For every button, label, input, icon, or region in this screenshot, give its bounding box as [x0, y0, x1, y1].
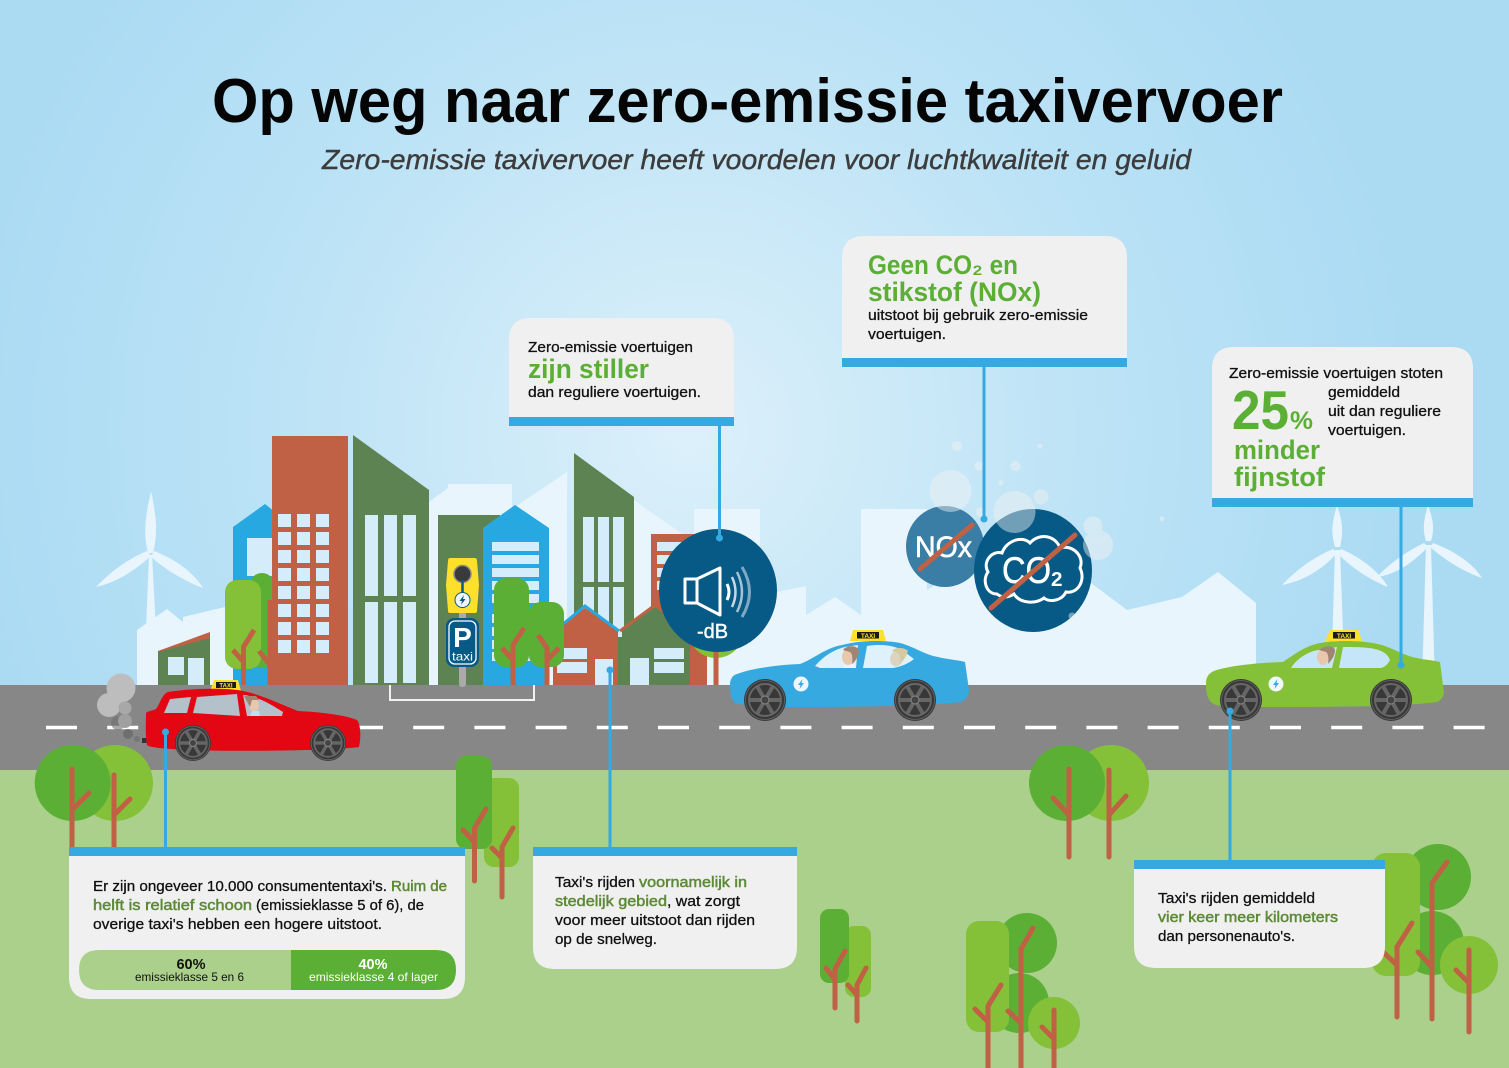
- city buildings: [158, 435, 743, 685]
- panel: vier keer meer kilometers: vier keer meer kilometers: [1158, 909, 1338, 926]
- panel: vier keer meer kilometers: dan personenauto's.: [1158, 928, 1295, 945]
- panel: consumententaxi's: helft is relatief schoon: [93, 897, 252, 914]
- tree behind speaker: [689, 606, 743, 685]
- panel: 25% minder fijnstof: minder: [1234, 435, 1320, 465]
- panel: 25% minder fijnstof: %: [1290, 407, 1313, 435]
- stacked bar 60/40: 40%: [358, 957, 388, 973]
- icon: CO2 cloud crossed out: CO: [1002, 550, 1051, 591]
- blue tower: [483, 505, 549, 685]
- panel: zijn stiller: dan reguliere voertuigen.: [528, 384, 701, 401]
- icon: speaker -dB: [659, 529, 777, 652]
- taxi sign: TAXI: [861, 633, 875, 640]
- panel: geen CO2 en stikstof: stikstof (NOx): [868, 277, 1041, 307]
- panel: 25% minder fijnstof: fijnstof: [1234, 462, 1326, 492]
- panel: consumententaxi's: overige taxi's hebben een hogere uitstoot.: [93, 916, 382, 933]
- taxi sign: [210, 680, 241, 691]
- panel: geen CO2 en stikstof: [842, 236, 1127, 367]
- green tower: [353, 435, 429, 685]
- panel: stedelijk gebied: voornamelijk in: [639, 874, 747, 891]
- stacked bar 60/40: [79, 950, 456, 990]
- subtitle: Zero-emissie taxivervoer heeft voordelen voor luchtkwaliteit en geluid: [321, 144, 1192, 175]
- blue building left: [233, 504, 275, 685]
- foreground trees: bottom right: [1372, 844, 1498, 1032]
- red building behind speaker: [651, 534, 707, 685]
- icon: CO2 cloud crossed out: [974, 509, 1092, 632]
- small house left: [158, 632, 210, 685]
- panel: zijn stiller: zijn stiller: [528, 354, 649, 384]
- charging and parking sign: [446, 558, 479, 687]
- panel: 25% minder fijnstof: [1212, 347, 1473, 507]
- icon: speaker -dB: -dB: [697, 621, 728, 643]
- background skyline: [137, 472, 1256, 685]
- foreground trees: far left: [35, 745, 153, 850]
- panel: consumententaxi's: [69, 847, 465, 999]
- exhaust smoke: [97, 674, 140, 742]
- wind turbines: right: [1282, 505, 1482, 685]
- panel: geen CO2 en stikstof: voertuigen.: [868, 326, 946, 343]
- icon: CO2 cloud crossed out: 2: [1051, 569, 1062, 591]
- panel: zijn stiller: Zero-emissie voertuigen: [528, 339, 693, 356]
- panel: stedelijk gebied: Taxi's rijden: [555, 874, 635, 891]
- charging and parking sign: taxi: [452, 650, 473, 664]
- passengers: [842, 646, 908, 668]
- panel: stedelijk gebied: [533, 847, 797, 969]
- panel: stedelijk gebied: op de snelweg.: [555, 931, 657, 948]
- emission bubbles: [930, 441, 1164, 620]
- panel: 25% minder fijnstof: 25: [1232, 379, 1289, 441]
- panel: 25% minder fijnstof: uit dan reguliere: [1328, 403, 1441, 420]
- foreground trees: bottom pair: [820, 909, 871, 1021]
- panel: stedelijk gebied: voor meer uitstoot dan rijden: [555, 912, 755, 929]
- panel: geen CO2 en stikstof: Geen CO₂ en: [868, 250, 1018, 280]
- driver: [244, 696, 260, 716]
- charging and parking sign: P: [453, 622, 472, 653]
- stacked bar 60/40: 60%: [176, 957, 206, 973]
- taxi parking bay: [390, 685, 534, 700]
- panel: consumententaxi's: Ruim de: [391, 878, 447, 895]
- driver: [1317, 646, 1335, 665]
- green house: [620, 605, 690, 685]
- stacked bar 60/40: emissieklasse 4 of lager: [309, 970, 438, 984]
- panel: consumententaxi's: (emissieklasse 5 of 6), de: [256, 897, 424, 914]
- road: [0, 685, 1509, 770]
- stacked bar 60/40: emissieklasse 5 en 6: [135, 970, 244, 984]
- taxi sign: [1325, 630, 1362, 641]
- taxi sign: TAXI: [219, 684, 233, 690]
- foreground trees: mid left: [456, 756, 519, 897]
- red house: [551, 606, 619, 685]
- wind turbine: left: [96, 491, 203, 630]
- second green tower: [574, 453, 634, 685]
- panel: zijn stiller: [509, 318, 734, 426]
- panel: consumententaxi's: Er zijn ongeveer 10.000 consumententaxi's.: [93, 878, 387, 895]
- panel: stedelijk gebied: stedelijk gebied: [555, 893, 667, 910]
- panel: stedelijk gebied: , wat zorgt: [667, 893, 741, 910]
- taxi sign: TAXI: [1337, 633, 1351, 640]
- panel: 25% minder fijnstof: gemiddeld: [1328, 384, 1400, 401]
- panel: 25% minder fijnstof: Zero-emissie voertuigen stoten: [1229, 365, 1443, 382]
- foreground trees: bottom group: [966, 913, 1080, 1068]
- taxi sign: [850, 630, 886, 641]
- trees by houses: [494, 578, 564, 685]
- red taxi: [142, 680, 360, 761]
- trees behind red tower: [225, 573, 274, 685]
- connector lines: [162, 367, 1404, 861]
- title: Op weg naar zero-emissie taxivervoer: [212, 67, 1283, 136]
- foreground trees: mid right: [1029, 745, 1149, 857]
- icon: NOx crossed out: NOx: [915, 531, 972, 564]
- grass: [0, 770, 1509, 1068]
- icon: NOx crossed out: [906, 506, 984, 587]
- green taxi: [1206, 630, 1444, 721]
- panel: 25% minder fijnstof: voertuigen.: [1328, 422, 1406, 439]
- blue taxi: [730, 630, 969, 721]
- panel: vier keer meer kilometers: [1134, 860, 1385, 968]
- panel: vier keer meer kilometers: Taxi's rijden gemiddeld: [1158, 890, 1315, 907]
- red tower: [272, 436, 348, 685]
- panel: geen CO2 en stikstof: uitstoot bij gebruik zero-emissie: [868, 307, 1088, 324]
- green block behind charger: [438, 515, 500, 685]
